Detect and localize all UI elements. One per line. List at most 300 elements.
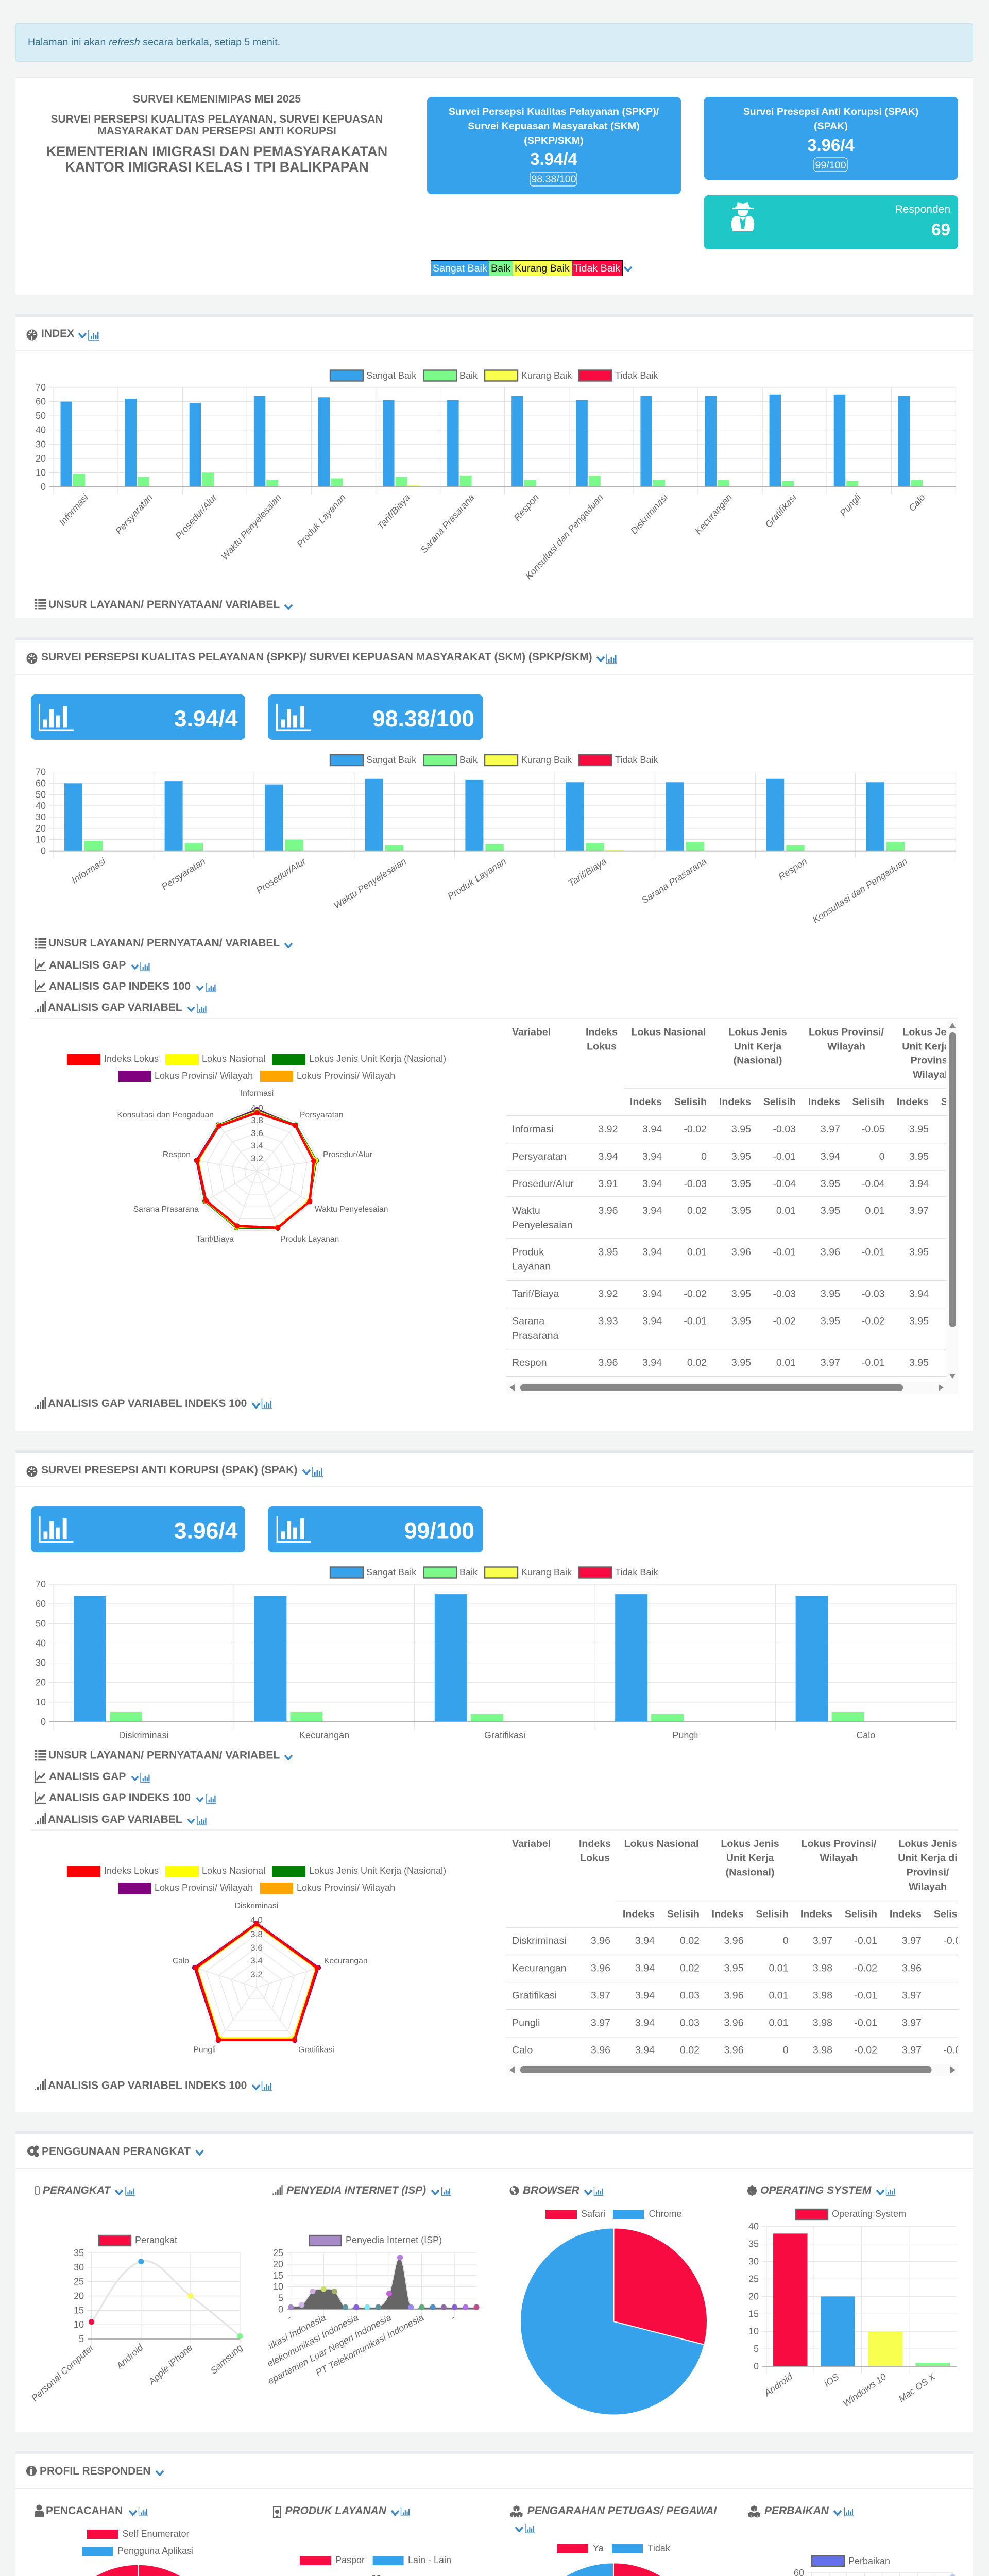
stat card: respondents: Responden	[895, 204, 950, 215]
table: service gap variabel: Selisih	[941, 1096, 974, 1108]
chart: device line chart: Apple iPhone	[146, 2342, 195, 2387]
chart: radar anti-corruption gap: 3.2	[250, 1970, 263, 1979]
table: anti-corruption gap variabel: 3.97	[902, 1935, 922, 1946]
heading: unsur layanan: UNSUR LAYANAN/ PERNYATAAN/ VARIABEL	[48, 1750, 280, 1761]
sub-panel: pengarahan petugas	[510, 2505, 717, 2576]
table: anti-corruption gap variabel: 0	[783, 2045, 789, 2056]
legend: pengarahan: Ya	[593, 2543, 604, 2553]
chart: pencacahan pie	[53, 2565, 223, 2576]
table: anti-corruption gap variabel: Calo	[512, 2045, 533, 2056]
table: service gap variabel: 3.95	[909, 1247, 929, 1258]
chart: radar service gap: Prosedur/Alur	[323, 1150, 372, 1159]
table: service gap variabel: Waktu	[512, 1205, 540, 1216]
table: service gap variabel: Selisih	[763, 1096, 796, 1108]
table: service gap variabel: 3.95	[821, 1178, 840, 1190]
chart: radar anti-corruption gap: 3.4	[250, 1956, 263, 1965]
legend: perbaikan: Perbaikan	[848, 2556, 890, 2566]
table: anti-corruption gap variabel: 3.96	[724, 2045, 744, 2056]
table: service gap variabel: 3.95	[909, 1357, 929, 1368]
table: anti-corruption gap variabel: Diskriminasi	[512, 1935, 567, 1946]
chart: radar anti-corruption gap: Kecurangan	[324, 1957, 368, 1965]
table: anti-corruption gap variabel: 3.94	[635, 2045, 655, 2056]
table: anti-corruption gap variabel: -0.02	[854, 1963, 877, 1974]
legend strip: rating colours: Baik	[491, 263, 510, 274]
table: service gap variabel: 3.95	[821, 1205, 840, 1216]
table: anti-corruption gap variabel: 0	[961, 2018, 966, 2029]
heading: pencacahan: PENCACAHAN	[46, 2505, 123, 2517]
table: service gap variabel: 3.96	[598, 1205, 618, 1216]
table: service gap variabel: 0	[879, 1151, 885, 1162]
chart: operating system bars: 35	[748, 2239, 759, 2249]
table: service gap variabel: 3.94	[642, 1205, 662, 1216]
legend: rating: Kurang Baik	[521, 370, 572, 381]
title block: survey names: KANTOR IMIGRASI KELAS I TPI BALIKPAPAN	[65, 159, 369, 175]
table: anti-corruption gap variabel: 3.97	[902, 2018, 922, 2029]
legend: rating	[330, 1567, 658, 1578]
table: service gap variabel: -0.02	[773, 1316, 796, 1327]
legend: perangkat: Perangkat	[135, 2235, 177, 2245]
chart: device line chart: 35	[74, 2248, 84, 2258]
table: anti-corruption gap variabel: 3.98	[813, 2018, 832, 2029]
table: service gap variabel: Lokus Jenis	[728, 1026, 787, 1038]
legend: rating: Baik	[459, 1567, 478, 1578]
table: service gap variabel: Persyaratan	[512, 1151, 567, 1162]
chart: radar service gap: 4.0	[251, 1103, 263, 1113]
chart: index bar chart: 10	[36, 467, 46, 478]
heading: analisis gap: ANALISIS GAP	[49, 959, 126, 971]
sub-panel: perangkat	[29, 2184, 245, 2403]
chart: index bar chart: 40	[36, 425, 46, 435]
legend: ISP	[309, 2235, 442, 2246]
table: service gap variabel: 3.95	[909, 1316, 929, 1327]
legend: gap radar: Lokus Provinsi/ Wilayah	[297, 1071, 395, 1081]
legend strip: rating colours: Sangat Baik	[433, 263, 487, 274]
table: anti-corruption gap variabel: 3.97	[902, 1990, 922, 2001]
table: service gap variabel: -0.03	[773, 1289, 796, 1300]
table: service gap variabel: -0.03	[684, 1178, 707, 1190]
table: service gap variabel: 3.94	[909, 1178, 929, 1190]
chart: SPKP bar chart: Sarana Prasarana	[640, 856, 708, 906]
heading: operating system: OPERATING SYSTEM	[760, 2184, 872, 2196]
heading: pengarahan petugas: PENGARAHAN PETUGAS/ PEGAWAI	[527, 2505, 717, 2517]
chart: operating system bars: 15	[748, 2309, 759, 2319]
table: anti-corruption gap variabel: 3.94	[635, 2018, 655, 2029]
chart: radar anti-corruption gap: Calo	[173, 1957, 189, 1965]
table: anti-corruption gap variabel: 0.02	[680, 1935, 700, 1946]
heading: penggunaan perangkat: PENGGUNAAN PERANGKAT	[42, 2145, 191, 2158]
table: service gap variabel: 3.95	[598, 1247, 618, 1258]
legend: rating: Kurang Baik	[521, 755, 572, 765]
table: service gap variabel: -0.01	[862, 1247, 885, 1258]
legend: pencacahan: Pengguna Aplikasi	[117, 2546, 194, 2556]
heading: unsur layanan: UNSUR LAYANAN/ PERNYATAAN/ VARIABEL	[48, 599, 280, 611]
chart: ISP area chart: -	[449, 2312, 456, 2323]
legend: gap radar	[67, 1054, 446, 1082]
table: anti-corruption gap variabel: 3.98	[813, 1963, 832, 1974]
heading: analisis gap variabel indeks 100: ANALISIS GAP VARIABEL INDEKS 100	[48, 2079, 247, 2092]
table: service gap variabel: Respon	[512, 1357, 547, 1368]
table: service gap variabel: -0.03	[773, 1124, 796, 1135]
table: anti-corruption gap variabel: 3.96	[902, 1963, 922, 1974]
table: anti-corruption gap variabel: Selisih	[667, 1909, 700, 1920]
table: service gap variabel: Selisih	[852, 1096, 885, 1108]
table: anti-corruption gap variabel: Indeks	[890, 1909, 922, 1920]
table: service gap variabel: 3.94	[642, 1124, 662, 1135]
stat card: index 3.94/4: 3.94/4	[174, 706, 238, 732]
chart: radar service gap: Tarif/Biaya	[196, 1235, 234, 1244]
chart: operating system bars: 0	[754, 2361, 759, 2371]
chart: radar service gap: 3.6	[251, 1128, 263, 1138]
table: anti-corruption gap variabel: 0	[961, 1990, 966, 2001]
table: anti-corruption gap variabel: 3.96	[724, 1935, 744, 1946]
chart: operating system bars: Mac OS X	[897, 2371, 937, 2404]
table: service gap variabel: 3.94	[821, 1151, 840, 1162]
legend: pengarahan	[557, 2543, 671, 2553]
title block: survey names: SURVEI KEMENIMIPAS MEI 2025	[133, 93, 301, 105]
stat card: SPAK	[704, 97, 958, 180]
table: anti-corruption gap variabel: 0.02	[680, 1963, 700, 1974]
legend: browser: Safari	[581, 2209, 605, 2219]
table: service gap variabel: 0	[701, 1151, 707, 1162]
panel: INDEX	[15, 314, 973, 618]
table: anti-corruption gap variabel: Indeks	[623, 1909, 655, 1920]
table: anti-corruption gap variabel: 3.94	[635, 1935, 655, 1946]
heading: analisis gap: ANALISIS GAP	[49, 1771, 126, 1783]
chart: radar anti-corruption gap: Pungli	[193, 2045, 216, 2055]
table: anti-corruption gap variabel: 3.96	[724, 1990, 744, 2001]
legend: rating: Sangat Baik	[366, 755, 417, 765]
chart: device line chart: Personal Computer	[29, 2342, 96, 2403]
legend: gap radar: Lokus Provinsi/ Wilayah	[155, 1071, 253, 1081]
table: service gap variabel: 3.95	[909, 1151, 929, 1162]
heading: analisis gap indeks 100: ANALISIS GAP INDEKS 100	[49, 1792, 191, 1804]
title block: survey names: KEMENTERIAN IMIGRASI DAN PEMASYARAKATAN	[46, 144, 387, 159]
table: service gap variabel: -0.01	[684, 1316, 707, 1327]
chart: operating system bars: iOS	[822, 2371, 841, 2388]
table: service gap variabel: 3.94	[642, 1357, 662, 1368]
table: service gap variabel: 3.95	[731, 1205, 751, 1216]
chart: index bar chart: 0	[41, 482, 46, 492]
chart: radar service gap: 3.4	[251, 1141, 263, 1150]
chart: index bar chart: Prosedur/Alur	[173, 492, 219, 541]
table: service gap variabel: 3.94	[642, 1178, 662, 1190]
table: anti-corruption gap variabel: Selisih	[934, 1909, 966, 1920]
table: anti-corruption gap variabel: 3.98	[813, 2045, 832, 2056]
chart: SPAK bar chart: Kecurangan	[299, 1730, 349, 1740]
chart: SPAK bar chart: Pungli	[672, 1730, 698, 1740]
table: anti-corruption gap variabel: Kecurangan	[512, 1963, 567, 1974]
table: anti-corruption gap variabel: 3.97	[591, 1990, 610, 2001]
chart: index bar chart: 20	[36, 453, 46, 464]
legend: produk layanan: Paspor	[335, 2555, 365, 2565]
sub-panel: produk layanan	[274, 2505, 455, 2576]
table: anti-corruption gap variabel: 3.94	[635, 1963, 655, 1974]
table: anti-corruption gap variabel: Lokus	[580, 1853, 610, 1864]
stat card: respondents	[704, 195, 958, 249]
chart: SPKP bar chart: Informasi	[70, 856, 108, 886]
table: anti-corruption gap variabel: 0	[783, 1935, 789, 1946]
heading: analisis gap variabel: ANALISIS GAP VARIABEL	[48, 1002, 182, 1013]
chart: ISP area chart	[268, 2249, 479, 2384]
sub-panel: penyedia internet	[268, 2184, 479, 2384]
chart: index bar chart: 50	[36, 411, 46, 421]
table: anti-corruption gap variabel: -0.01	[854, 1990, 877, 2001]
chart: SPKP bar chart: 30	[36, 812, 46, 822]
table: service gap variabel: Lokus Provinsi/	[809, 1026, 884, 1038]
legend: rating: Baik	[459, 755, 478, 765]
table: anti-corruption gap variabel: 3.97	[902, 2045, 922, 2056]
chart: index bar chart: Calo	[907, 492, 927, 513]
table: anti-corruption gap variabel: Indeks	[712, 1909, 744, 1920]
heading: analisis gap	[35, 1771, 150, 1783]
table: anti-corruption gap variabel: 0.01	[769, 2018, 789, 2029]
table: service gap variabel: 0.02	[687, 1357, 707, 1368]
table: anti-corruption gap variabel	[506, 1838, 966, 2076]
title block: survey names	[46, 93, 387, 175]
legend: produk layanan: Lain - Lain	[408, 2555, 451, 2565]
chart: ISP area chart: 15	[273, 2270, 283, 2281]
table: service gap variabel: 3.94	[642, 1316, 662, 1327]
table: service gap variabel: 3.95	[821, 1289, 840, 1300]
table: anti-corruption gap variabel: 3.97	[813, 1935, 832, 1946]
table: anti-corruption gap variabel: 3.96	[591, 1935, 610, 1946]
table: anti-corruption gap variabel: 3.96	[724, 2018, 744, 2029]
chart: operating system bars: 40	[748, 2222, 759, 2232]
table: anti-corruption gap variabel: -0.01	[943, 1935, 966, 1946]
chart: SPKP bar chart: Konsultasi dan Pengaduan	[811, 856, 909, 925]
stat card: index 3.94/4	[31, 694, 245, 740]
legend strip: rating colours	[431, 261, 632, 276]
chart: SPKP bar chart: 20	[36, 823, 46, 834]
table: service gap variabel: Lokus Nasional	[632, 1026, 706, 1038]
table: service gap variabel: -0.02	[684, 1124, 707, 1135]
table: service gap variabel: 3.95	[731, 1151, 751, 1162]
chart: index bar chart: 60	[36, 397, 46, 407]
chart: radar anti-corruption gap	[173, 1902, 368, 2055]
table: service gap variabel: Produk	[512, 1247, 544, 1258]
table: anti-corruption gap variabel: (Nasional)	[726, 1867, 774, 1878]
legend: rating	[330, 370, 658, 381]
legend: pencacahan	[82, 2529, 194, 2556]
stat card: index 98.38/100: 98.38/100	[372, 706, 474, 732]
table: service gap variabel: 3.95	[731, 1289, 751, 1300]
panel: device usage	[15, 2131, 973, 2432]
table: anti-corruption gap variabel: 0.03	[680, 1990, 700, 2001]
chart: operating system bars: 5	[754, 2344, 759, 2354]
chart: SPKP bar chart: Produk Layanan	[446, 856, 508, 902]
table: anti-corruption gap variabel: 3.96	[591, 1963, 610, 1974]
sub-panel: operating system	[747, 2184, 957, 2409]
chart: SPAK bar chart: Gratifikasi	[484, 1730, 525, 1740]
heading: analisis gap variabel indeks 100: ANALISIS GAP VARIABEL INDEKS 100	[48, 1398, 247, 1410]
table: service gap variabel: Layanan	[512, 1261, 551, 1273]
alert: refresh notice: Halaman ini akan refresh secara berkala, setiap 5 menit.	[28, 37, 280, 48]
chart: radar anti-corruption gap: 4.0	[250, 1915, 263, 1925]
chart: ISP area chart: PT Telekomunikasi Indonesia	[314, 2312, 425, 2378]
table: anti-corruption gap variabel: 3.94	[635, 1990, 655, 2001]
heading: SPAK: SURVEI PRESEPSI ANTI KORUPSI (SPAK) (SPAK)	[41, 1464, 297, 1476]
table: service gap variabel: 3.95	[731, 1357, 751, 1368]
table: service gap variabel: Indeks	[897, 1096, 929, 1108]
heading: INDEX: INDEX	[41, 328, 74, 340]
chart: index bar chart: 70	[36, 382, 46, 393]
chart: index bar chart	[36, 382, 956, 582]
table: anti-corruption gap variabel: Lokus Jenis	[898, 1838, 957, 1850]
chart: device line chart	[29, 2248, 245, 2403]
table: service gap variabel: 3.94	[642, 1289, 662, 1300]
table: service gap variabel: Penyelesaian	[512, 1219, 573, 1231]
heading: INDEX	[27, 328, 99, 340]
table: service gap variabel: 3.95	[731, 1124, 751, 1135]
table: service gap variabel: Prasarana	[512, 1330, 559, 1342]
table: service gap variabel: 3.96	[598, 1357, 618, 1368]
table: service gap variabel: 3.92	[598, 1289, 618, 1300]
chart: index bar chart: Pungli	[838, 492, 863, 518]
chart: index bar chart: Informasi	[57, 492, 91, 528]
title block: survey names: MASYARAKAT DAN PERSEPSI ANTI KORUPSI	[97, 125, 336, 137]
sub-panel: perbaikan	[739, 2505, 957, 2576]
stat card: SPKP/SKM: Survei Kepuasan Masyarakat (SKM)	[468, 121, 640, 132]
chart: SPAK bar chart: 40	[36, 1638, 46, 1648]
chart: SPKP bar chart: Waktu Penyelesaian	[332, 856, 408, 911]
table: anti-corruption gap variabel: 0.03	[680, 2018, 700, 2029]
table: anti-corruption gap variabel: 3.98	[813, 1990, 832, 2001]
chart: operating system bars	[748, 2222, 957, 2409]
heading: unsur layanan: UNSUR LAYANAN/ PERNYATAAN/ VARIABEL	[48, 937, 280, 949]
chart: operating system bars: 30	[748, 2257, 759, 2267]
table: service gap variabel: -0.04	[862, 1178, 885, 1190]
legend: gap radar: Lokus Nasional	[202, 1054, 265, 1064]
stat card: index 99/100	[268, 1506, 483, 1552]
table: service gap variabel: 3.94	[909, 1289, 929, 1300]
legend: browser	[545, 2209, 682, 2219]
table: service gap variabel: 3.96	[821, 1247, 840, 1258]
table: anti-corruption gap variabel: Indeks	[579, 1838, 611, 1850]
table: anti-corruption gap variabel: Wilayah	[909, 1882, 947, 1893]
chart: SPKP bar chart: 10	[36, 835, 46, 845]
chart: operating system bars: 20	[748, 2291, 759, 2301]
table: service gap variabel: 0.01	[776, 1205, 796, 1216]
table: service gap variabel: Wilayah	[827, 1041, 865, 1052]
heading: browser	[510, 2184, 603, 2196]
stat card: SPAK: 99/100	[815, 160, 846, 171]
chart: index bar chart: Sarana Prasarana	[418, 492, 476, 555]
chart: browser pie	[520, 2228, 707, 2415]
table: anti-corruption gap variabel: Gratifikasi	[512, 1990, 557, 2001]
table: service gap variabel: Prosedur/Alur	[512, 1178, 574, 1190]
sub-panel: pencacahan	[35, 2505, 223, 2576]
panel: SPAK survey	[15, 1450, 973, 2112]
heading: produk layanan: PRODUK LAYANAN	[285, 2505, 387, 2517]
legend: rating	[330, 755, 658, 766]
heading: browser: BROWSER	[523, 2184, 580, 2196]
table: service gap variabel: -0.01	[862, 1357, 885, 1368]
panel: respondent profile	[15, 2451, 973, 2576]
table: anti-corruption gap variabel: Unit Kerja	[726, 1853, 774, 1864]
table: service gap variabel: -0.02	[862, 1316, 885, 1327]
stat card: respondents: 69	[931, 220, 950, 239]
legend strip: rating colours: Kurang Baik	[515, 263, 570, 274]
chart: SPKP bar chart: Respon	[776, 856, 809, 882]
table: service gap variabel: Selisih	[674, 1096, 707, 1108]
table: service gap variabel: Indeks	[719, 1096, 751, 1108]
chart: index bar chart: Persyaratan	[113, 492, 155, 536]
stat card: SPAK: (SPAK)	[814, 121, 848, 132]
heading: ISP: PENYEDIA INTERNET (ISP)	[286, 2184, 426, 2196]
table: anti-corruption gap variabel: Selisih	[845, 1909, 877, 1920]
chart: ISP area chart: 10	[273, 2282, 283, 2292]
chart: index bar chart: Produk Layanan	[295, 492, 348, 549]
chart: ISP area chart: Departemen Luar Negeri Indonesia	[260, 2312, 393, 2389]
chart: SPAK bar chart: 0	[41, 1717, 46, 1727]
stat card: SPKP/SKM: 3.94/4	[530, 149, 578, 168]
chart: radar service gap: 3.8	[251, 1115, 263, 1125]
legend: pengarahan: Tidak	[648, 2543, 671, 2553]
stat card: index 98.38/100	[268, 694, 483, 740]
chart: radar service gap: 3.2	[251, 1154, 263, 1163]
table: anti-corruption gap variabel: Wilayah	[820, 1853, 858, 1864]
heading: perbaikan	[748, 2505, 854, 2518]
table: service gap variabel: Provinsi/	[911, 1055, 953, 1066]
table: service gap variabel: 3.91	[598, 1178, 618, 1190]
legend: gap radar	[67, 1866, 446, 1894]
table: service gap variabel: (Nasional)	[734, 1055, 782, 1066]
table: anti-corruption gap variabel: Lokus Jenis	[721, 1838, 779, 1850]
table: service gap variabel: Variabel	[512, 1026, 551, 1038]
table: service gap variabel: -0.05	[862, 1124, 885, 1135]
table: service gap variabel: Informasi	[512, 1124, 554, 1135]
stat card: index 3.96/4	[31, 1506, 245, 1552]
table: service gap variabel: Indeks	[808, 1096, 840, 1108]
chart: SPKP bar chart: Prosedur/Alur	[254, 856, 308, 895]
table: service gap variabel: 3.94	[642, 1151, 662, 1162]
table: service gap variabel: -0.03	[862, 1289, 885, 1300]
table: anti-corruption gap variabel: -0.02	[854, 2045, 877, 2056]
chart: SPAK bar chart: 60	[36, 1599, 46, 1609]
table: service gap variabel: 3.97	[821, 1124, 840, 1135]
legend: operating system	[796, 2209, 906, 2219]
table: anti-corruption gap variabel: Indeks	[800, 1909, 832, 1920]
table: service gap variabel: 0.01	[865, 1205, 885, 1216]
chart: radar service gap: Persyaratan	[300, 1111, 344, 1120]
table: anti-corruption gap variabel: 0.01	[769, 1990, 789, 2001]
chart: SPAK bar chart: 30	[36, 1658, 46, 1668]
table: service gap variabel: 3.97	[909, 1205, 929, 1216]
table: service gap variabel: Indeks	[630, 1096, 662, 1108]
table: anti-corruption gap variabel: -0.01	[854, 1935, 877, 1946]
table: anti-corruption gap variabel: Lokus Provinsi/	[802, 1838, 877, 1850]
legend: rating: Baik	[459, 370, 478, 381]
table: service gap variabel: -0.01	[773, 1247, 796, 1258]
table: anti-corruption gap variabel: Provinsi/	[907, 1867, 949, 1878]
chart: radar service gap	[117, 1089, 388, 1244]
chart: pengarahan donut	[520, 2563, 707, 2576]
chart: SPAK bar chart: Calo	[856, 1730, 875, 1740]
stat card: SPKP/SKM	[427, 97, 681, 194]
legend: rating: Tidak Baik	[615, 1567, 658, 1578]
legend: rating: Sangat Baik	[366, 370, 417, 381]
chart: SPKP bar chart: 60	[36, 778, 46, 788]
alert: refresh notice	[15, 24, 973, 62]
table: service gap variabel: 3.96	[731, 1247, 751, 1258]
chart: radar service gap: Informasi	[241, 1089, 274, 1098]
legend: perangkat	[99, 2235, 177, 2246]
chart: radar anti-corruption gap: 3.6	[250, 1943, 263, 1953]
chart: device line chart: 15	[74, 2305, 84, 2315]
chart: radar anti-corruption gap: Diskriminasi	[235, 1902, 278, 1910]
stat card: SPAK: 3.96/4	[807, 135, 855, 155]
chart: device line chart: 5	[79, 2334, 84, 2344]
